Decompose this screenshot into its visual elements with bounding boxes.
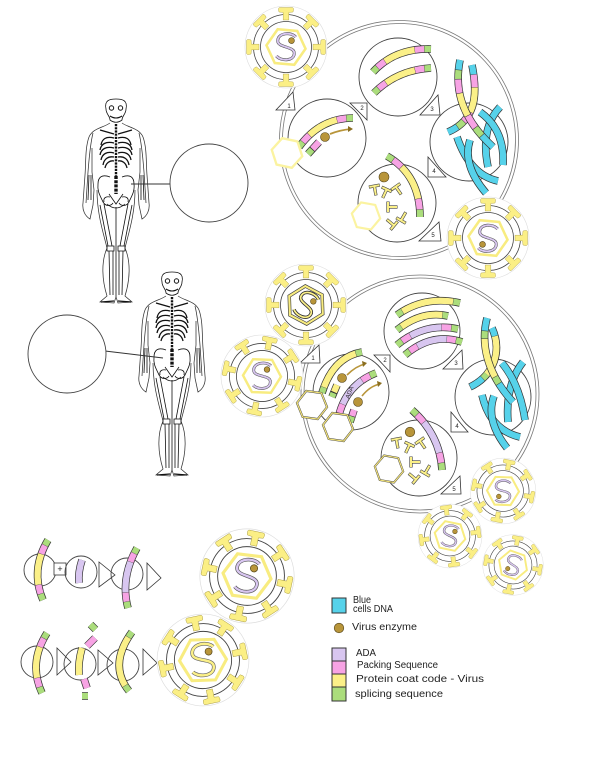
legend: blue cells DNA bbox=[332, 595, 393, 615]
panel: normal cell process bbox=[245, 6, 529, 279]
virus: entering cell left bbox=[213, 327, 311, 425]
step circle 5: assembly parts bbox=[373, 410, 457, 496]
magnifier circle 1 bbox=[170, 144, 248, 222]
legend bbox=[332, 595, 484, 701]
ADA fragment bbox=[79, 560, 82, 583]
step circle 2: ADA transcription bbox=[313, 352, 389, 430]
step triangles bbox=[300, 345, 468, 494]
virus: result with ADA bbox=[191, 520, 303, 632]
step triangles: 3 bbox=[430, 107, 434, 113]
step circle 4: integration with blue cell DNA bbox=[430, 60, 508, 193]
human skeleton figure 2 bbox=[139, 272, 205, 476]
icons: empty hexagon capsids at entry bbox=[295, 390, 355, 442]
legend: packing sequence: Packing Sequence bbox=[357, 660, 438, 671]
connector line to magnifier 2 bbox=[105, 351, 163, 358]
step triangles: 1 bbox=[287, 104, 291, 110]
legend: blue cells DNA: cells DNA bbox=[353, 604, 393, 615]
step triangles: 3 bbox=[454, 361, 458, 367]
legend: splicing sequence bbox=[332, 687, 443, 701]
step triangles: 4 bbox=[432, 169, 436, 175]
legend: packing sequence bbox=[332, 660, 438, 674]
legend: virus enzyme: Virus enzyme bbox=[352, 622, 417, 633]
legend: protein coat code - virus bbox=[332, 674, 484, 687]
step triangles: 1 bbox=[311, 356, 315, 362]
human skeleton figure 1 bbox=[83, 99, 149, 303]
large cell outline bbox=[301, 275, 539, 513]
legend: ADA bbox=[332, 648, 376, 661]
label: ADA: ADA bbox=[345, 386, 355, 400]
legend: blue cells DNA: Blue bbox=[353, 595, 371, 606]
step circle 3: four strands bbox=[384, 293, 462, 369]
step triangles: 5 bbox=[452, 487, 456, 493]
step triangles: 2 bbox=[383, 358, 387, 364]
magnifier circle 2 bbox=[28, 315, 106, 393]
icon: empty hexagon capsid at entry bbox=[269, 137, 305, 169]
legend: ADA: ADA bbox=[356, 648, 376, 659]
step triangles: 4 bbox=[455, 424, 459, 430]
virus: leaving cell 2 bbox=[414, 500, 486, 572]
large cell outline bbox=[280, 20, 518, 260]
step circle 3: two strands bbox=[359, 38, 437, 116]
virus: entering cell top bbox=[265, 264, 347, 346]
virus: result without ADA bbox=[149, 606, 257, 714]
plus box: + bbox=[57, 564, 63, 574]
step triangles bbox=[276, 92, 446, 241]
connector line to magnifier 1 bbox=[131, 183, 172, 185]
virus: leaving cell 3 bbox=[478, 530, 548, 600]
legend: protein coat code - virus: Protein coat code - Virus bbox=[356, 674, 484, 685]
panel: summary row 2 bbox=[21, 606, 257, 714]
panel: summary row 1 bbox=[24, 520, 303, 632]
step circle 4: integration with blue cell DNA bbox=[455, 318, 531, 448]
panel: modified cell process with ADA bbox=[213, 264, 548, 600]
separated strand pieces bbox=[79, 624, 96, 696]
plus box bbox=[54, 563, 66, 575]
legend: splicing sequence: splicing sequence bbox=[355, 689, 443, 700]
virus: entering cell bbox=[245, 6, 327, 88]
step circle 5: assembly parts bbox=[350, 156, 436, 242]
virus: leaving cell 1 bbox=[464, 452, 542, 530]
step circle 2: transcription bbox=[288, 99, 366, 177]
virus: leaving cell bbox=[447, 197, 529, 279]
step triangles: 5 bbox=[431, 233, 435, 239]
step triangles: 2 bbox=[360, 106, 364, 112]
